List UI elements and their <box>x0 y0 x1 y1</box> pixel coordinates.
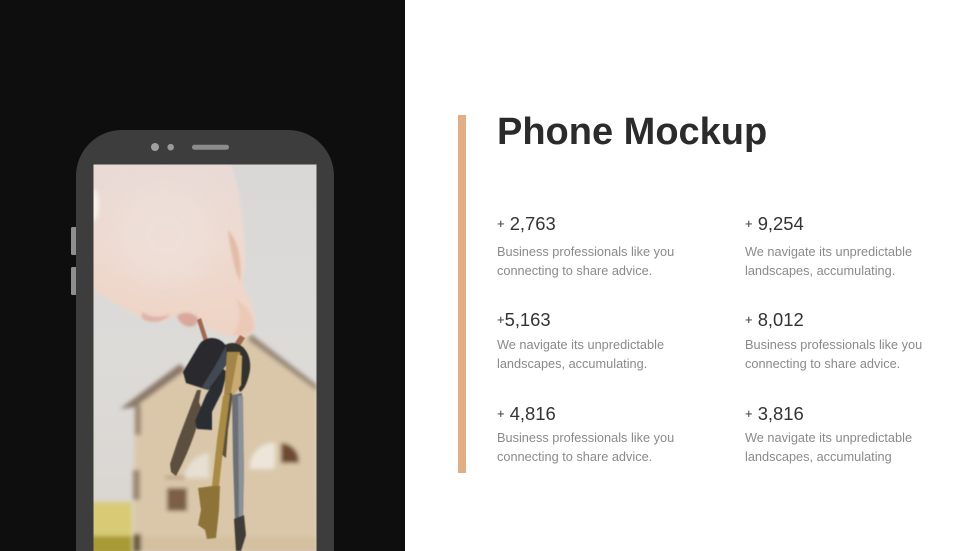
house <box>120 334 317 551</box>
stat: 5,163: We navigate its unpredictable <box>497 337 664 352</box>
stat: 2,763 <box>497 213 674 278</box>
phone body <box>76 130 334 551</box>
black second key <box>195 368 227 430</box>
stat: 5,163: landscapes, accumulating. <box>497 356 647 371</box>
panel: black left background <box>0 0 405 551</box>
stat: 4,816: Business professionals like you <box>497 430 674 445</box>
keys <box>170 318 250 551</box>
hand <box>87 160 255 337</box>
title: Phone Mockup <box>497 111 767 153</box>
stat: 4,816: connecting to share advice. <box>497 449 652 464</box>
gold key <box>224 352 240 396</box>
stat: 4,816: + 4,816 <box>497 403 556 424</box>
yellow block <box>90 502 132 551</box>
stat: 3,816: landscapes, accumulating <box>745 449 892 464</box>
accent bar <box>458 114 466 472</box>
stat: 3,816 <box>745 403 912 464</box>
round dark key head <box>222 343 250 392</box>
stat: 9,254 <box>745 213 912 278</box>
photo: hand holding keys in front of a wooden house <box>87 160 317 551</box>
stat: 4,816 <box>497 403 674 464</box>
stat: 8,012: Business professionals like you <box>745 337 922 352</box>
stat: 9,254: landscapes, accumulating. <box>745 263 895 278</box>
phone side buttons <box>71 227 77 295</box>
silver key <box>232 393 244 520</box>
long dark key <box>170 390 202 476</box>
stat: 5,163 <box>497 309 664 371</box>
stat: 3,816: + 3,816 <box>745 403 804 424</box>
stat: 9,254: We navigate its unpredictable <box>745 244 912 259</box>
stat: 5,163: +5,163 <box>497 309 551 330</box>
stat: 2,763: connecting to share advice. <box>497 263 652 278</box>
stat: 2,763: Business professionals like you <box>497 244 674 259</box>
stat: 8,012: + 8,012 <box>745 309 804 330</box>
thin dark key <box>221 393 233 458</box>
black fob <box>183 338 226 390</box>
stat: 3,816: We navigate its unpredictable <box>745 430 912 445</box>
phone camera and speaker <box>151 143 229 151</box>
stat: 2,763: + 2,763 <box>497 213 556 234</box>
stat: 9,254: + 9,254 <box>745 213 804 234</box>
phone mockup <box>71 130 334 551</box>
stat: 8,012 <box>745 309 922 371</box>
stat: 8,012: connecting to share advice. <box>745 356 900 371</box>
